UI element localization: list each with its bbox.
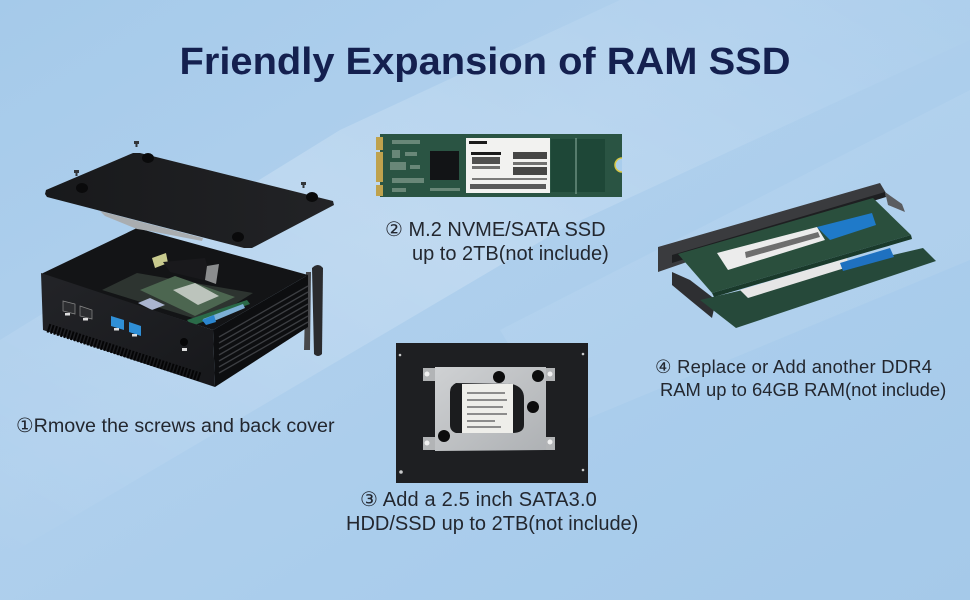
rear antenna — [304, 272, 311, 350]
lower module — [700, 248, 936, 328]
screws — [74, 141, 306, 188]
caption 4: ④ Replace or Add another DDR4 — [655, 356, 932, 377]
right end clip — [885, 192, 905, 212]
USB ports — [63, 301, 141, 336]
upper module — [678, 198, 911, 293]
case front — [41, 273, 215, 387]
power jack — [180, 338, 188, 346]
illustration: mini PC with back cover removed — [41, 141, 334, 387]
caption 2: up to 2TB(not include) — [412, 243, 609, 265]
black mounting plate — [396, 343, 588, 483]
illustration: 3.5 inch hard drive on mounting plate — [396, 343, 588, 483]
slot connector — [658, 183, 886, 272]
caption 3: HDD/SSD up to 2TB(not include) — [346, 513, 638, 535]
caption 3: ③ Add a 2.5 inch SATA3.0 — [360, 489, 597, 511]
drive body — [435, 367, 546, 451]
sticker — [466, 138, 550, 193]
front vents — [48, 328, 200, 377]
title: Friendly Expansion of RAM SSD — [180, 41, 790, 83]
illustration: M.2 SSD — [376, 134, 622, 197]
front antenna — [312, 265, 323, 356]
bracket ears — [423, 368, 555, 450]
mounting holes — [438, 370, 544, 442]
notch — [615, 158, 622, 172]
illustration: DDR4 RAM modules in slots — [658, 183, 936, 328]
drive label — [450, 383, 524, 433]
caption 1: ①Rmove the screws and back cover — [16, 415, 335, 437]
caption 4: RAM up to 64GB RAM(not include) — [660, 379, 946, 400]
motherboard — [102, 273, 253, 322]
caption 2: ② M.2 NVME/SATA SSD — [385, 219, 606, 241]
cover underside rail — [100, 211, 203, 241]
controller chip — [430, 151, 459, 180]
case side with fins — [213, 275, 308, 387]
heat sink and connectors — [152, 253, 168, 268]
left end clips and lower slot — [672, 272, 716, 318]
back cover plate — [45, 153, 334, 248]
rubber feet — [76, 153, 318, 242]
case interior — [41, 228, 308, 330]
memory pads — [551, 139, 605, 192]
circuit board — [380, 134, 622, 197]
